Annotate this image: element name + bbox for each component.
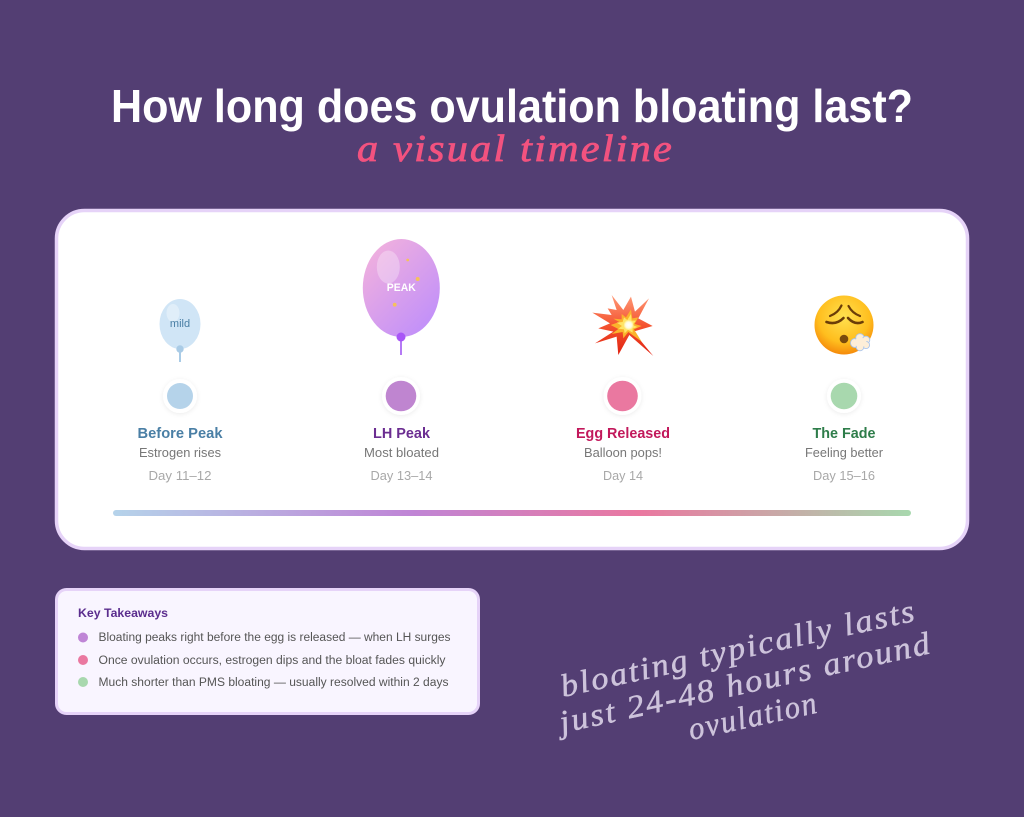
timeline gradient bar bbox=[113, 510, 911, 516]
handwritten callout: ovulation bbox=[685, 684, 821, 747]
day: Day 13–14 bbox=[370, 469, 433, 483]
label: LH Peak bbox=[373, 426, 431, 442]
icon: mild balloon bbox=[160, 299, 200, 362]
title: How long does ovulation bloating last? bbox=[111, 80, 913, 132]
stage: the fade bbox=[805, 296, 883, 483]
marker bbox=[163, 379, 197, 413]
day: Day 11–12 bbox=[148, 469, 212, 483]
handwritten callout bbox=[552, 592, 935, 747]
subtitle: a visual timeline bbox=[357, 128, 674, 170]
marker bbox=[604, 377, 642, 415]
description: Estrogen rises bbox=[139, 446, 221, 460]
icon: peak balloon: PEAK bbox=[387, 282, 416, 294]
description: Most bloated bbox=[364, 446, 439, 460]
takeaway 3: Much shorter than PMS bloating — usually resolved within 2 days bbox=[98, 677, 449, 689]
icon: explosion bbox=[592, 295, 653, 356]
panel: key takeaways bbox=[56, 590, 478, 714]
label: Egg Released bbox=[576, 426, 670, 442]
takeaway 2: Once ovulation occurs, estrogen dips and the bloat fades quickly bbox=[98, 655, 446, 667]
takeaway 1: Bloating peaks right before the egg is released — when LH surges bbox=[98, 632, 451, 644]
day: Day 14 bbox=[603, 469, 643, 483]
stage: lh peak bbox=[363, 239, 440, 483]
takeaways heading: Key Takeaways bbox=[78, 606, 168, 620]
icon: peak balloon bbox=[363, 239, 440, 355]
label: Before Peak bbox=[138, 426, 223, 442]
handwritten callout: just 24-48 hours around bbox=[552, 624, 935, 741]
stage: egg released bbox=[576, 295, 670, 483]
panel: timeline bbox=[56, 210, 968, 548]
description: Feeling better bbox=[805, 446, 883, 460]
description: Balloon pops! bbox=[584, 446, 662, 460]
stage: before peak bbox=[138, 299, 223, 483]
marker bbox=[827, 379, 861, 413]
puff of air bbox=[850, 334, 870, 351]
icon: mild balloon: mild bbox=[170, 318, 190, 330]
handwritten callout: bloating typically lasts bbox=[557, 592, 919, 704]
icon: exhaling face bbox=[814, 296, 874, 354]
day: Day 15–16 bbox=[813, 469, 875, 483]
marker bbox=[382, 377, 420, 415]
label: The Fade bbox=[812, 426, 876, 442]
